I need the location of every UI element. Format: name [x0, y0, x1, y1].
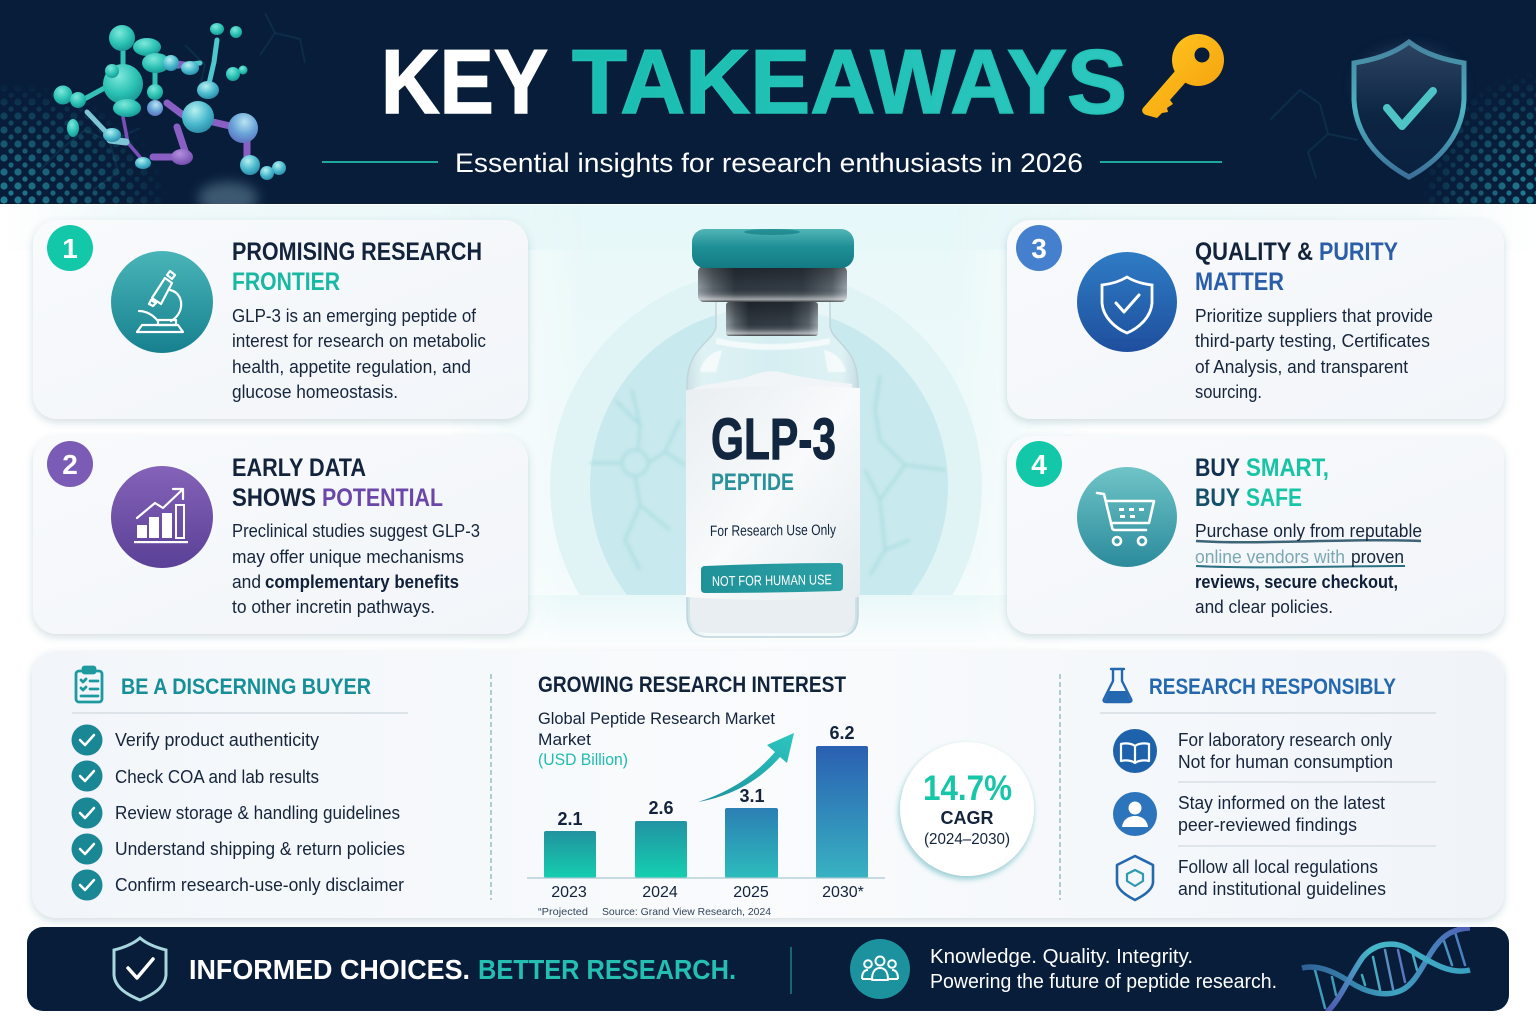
bar chart: 6.2 — [829, 723, 855, 743]
card 3 heading: QUALITY & — [1195, 238, 1313, 266]
card 1 body — [232, 306, 486, 402]
icon: header shield — [1354, 42, 1464, 177]
card 2 body: and — [232, 572, 261, 592]
CAGR callout — [900, 742, 1034, 876]
CAGR callout: 14.7% — [923, 769, 1012, 808]
vial stopper — [726, 302, 818, 336]
card 3 heading: PURITY — [1319, 238, 1398, 266]
card 2 heading: SHOWS — [232, 484, 316, 512]
checklist: Confirm research-use-only disclaimer — [115, 875, 404, 895]
footer headline — [189, 954, 736, 985]
card 3 body: third-party testing, Certificates — [1195, 331, 1430, 351]
card 2 body: to other incretin pathways. — [232, 597, 435, 617]
powder base — [690, 596, 855, 633]
item: local regulations: Follow all local regulations — [1178, 857, 1378, 877]
card 1 body: GLP-3 is an emerging peptide of — [232, 306, 477, 326]
vial label — [686, 386, 860, 600]
card 4 body: online vendors with — [1195, 547, 1345, 567]
title: TAKEAWAYS — [572, 32, 1127, 133]
card 2 body: may offer unique mechanisms — [232, 547, 464, 567]
card 4 body: reviews, secure checkout, — [1195, 572, 1398, 592]
card 2 heading: EARLY DATA — [232, 454, 366, 482]
checklist: Understand shipping & return policies — [115, 839, 405, 859]
item: local regulations — [1117, 856, 1386, 900]
card 4 heading: BUY — [1195, 454, 1240, 482]
icon: footer shield — [114, 938, 166, 1000]
badge 3 — [1016, 225, 1062, 271]
bar chart: 2023 — [551, 884, 587, 901]
card 3 heading — [1195, 238, 1398, 296]
icon: DNA helix — [1302, 928, 1470, 1012]
icon: microscope — [111, 251, 213, 353]
card 4 body: and clear policies. — [1195, 597, 1333, 617]
icon: growth chart — [111, 466, 213, 568]
item: local regulations: and institutional guidelines — [1178, 879, 1386, 899]
molecule illustration — [54, 23, 286, 180]
header banner — [0, 0, 1536, 214]
icon: quality shield — [1077, 252, 1177, 352]
bar chart — [527, 723, 885, 901]
card 4: buy smart — [1007, 436, 1504, 634]
card 1 heading: FRONTIER — [232, 268, 340, 296]
bar chart: 2.1 — [557, 809, 583, 829]
card 2 heading — [232, 454, 443, 512]
section: growing research interest — [527, 672, 1034, 918]
badge 1: 1 — [62, 233, 78, 264]
footer text — [930, 946, 1277, 993]
badge 4: 4 — [1031, 449, 1047, 480]
badge 4 — [1016, 441, 1062, 487]
icon: shopping cart — [1077, 467, 1177, 567]
chart subtitle: Market — [538, 730, 591, 749]
vial cap — [692, 229, 854, 268]
card 2: early data — [33, 436, 528, 634]
item: stay informed — [1113, 792, 1385, 836]
badge 2: 2 — [62, 449, 78, 480]
vial crimp — [698, 266, 847, 302]
item: laboratory use: For laboratory research only — [1178, 730, 1392, 750]
card 4 heading: BUY — [1195, 484, 1240, 512]
vial glass body — [687, 300, 858, 637]
vial label: GLP-3 — [711, 407, 836, 472]
card 1 heading — [232, 238, 482, 296]
footnote: Source: Grand View Research, 2024 — [602, 906, 771, 918]
bar chart: 3.1 — [739, 786, 765, 806]
vial — [686, 229, 860, 637]
card 2 heading: POTENTIAL — [322, 484, 443, 512]
footer headline: BETTER RESEARCH. — [478, 954, 736, 985]
bottom panel — [32, 651, 1504, 918]
chart subtitle: Global Peptide Research Market — [538, 709, 775, 728]
card 1 body: glucose homeostasis. — [232, 382, 398, 402]
subtitle: Essential insights for research enthusiasts in 2026 — [455, 148, 1083, 178]
checklist — [72, 724, 405, 900]
chart subtitle — [538, 709, 775, 769]
item: laboratory use: Not for human consumption — [1178, 752, 1393, 772]
bar chart: 2025 — [733, 884, 769, 901]
item: stay informed: Stay informed on the latest — [1178, 793, 1385, 813]
icon: people — [850, 939, 910, 999]
card 4 heading — [1195, 454, 1329, 512]
card 1 heading: PROMISING RESEARCH — [232, 238, 482, 266]
card 2 body — [232, 521, 480, 617]
card 1 body: health, appetite regulation, and — [232, 357, 471, 377]
chart subtitle: (USD Billion) — [538, 750, 628, 769]
footer text: Knowledge. Quality. Integrity. — [930, 946, 1193, 968]
vial label: For Research Use Only — [710, 522, 836, 540]
card 4 body: Purchase only from reputable — [1195, 521, 1422, 541]
section: be a discerning buyer — [72, 667, 408, 900]
vial label: NOT FOR HUMAN USE — [712, 571, 832, 589]
card 3 body: Prioritize suppliers that provide — [1195, 306, 1433, 326]
checklist: Verify product authenticity — [115, 730, 319, 750]
card 3 heading: MATTER — [1195, 268, 1284, 296]
card 3 body: of Analysis, and transparent — [1195, 357, 1408, 377]
icon: golden key — [1142, 34, 1224, 118]
glass highlights — [700, 338, 846, 372]
card 3 body — [1195, 306, 1433, 402]
footer banner — [27, 927, 1509, 1012]
card 4 body — [1195, 521, 1422, 617]
item: laboratory use — [1113, 729, 1393, 773]
card 4 body: proven — [1351, 547, 1404, 567]
arrow: growth trend — [698, 733, 794, 802]
checklist: Review storage & handling guidelines — [115, 803, 400, 823]
badge 2 — [47, 441, 93, 487]
title: KEY — [381, 32, 548, 133]
bar chart: 2024 — [642, 884, 678, 901]
card 4 heading: SMART, — [1246, 454, 1329, 482]
center background — [0, 205, 1536, 702]
badge 1 — [47, 225, 93, 271]
card 2 body: complementary benefits — [265, 572, 459, 592]
badge 3: 3 — [1031, 233, 1047, 264]
card 1: promising research frontier — [33, 220, 528, 419]
heading: RESEARCH RESPONSIBLY — [1149, 674, 1396, 699]
vial powder — [692, 371, 853, 394]
footer text: Powering the future of peptide research. — [930, 971, 1277, 993]
bar chart: 2.6 — [648, 798, 674, 818]
item: stay informed: peer-reviewed findings — [1178, 815, 1357, 835]
section: research responsibly — [1100, 669, 1436, 900]
CAGR callout: (2024–2030) — [924, 831, 1010, 848]
icon: flask — [1104, 669, 1131, 702]
card 3 body: sourcing. — [1195, 382, 1262, 402]
icon: clipboard — [76, 667, 102, 702]
bar chart: 2030* — [822, 884, 864, 901]
checklist: Check COA and lab results — [115, 767, 319, 787]
card 3: quality and purity — [1007, 220, 1504, 419]
footnote: “Projected — [538, 906, 588, 918]
heading: GROWING RESEARCH INTEREST — [538, 672, 846, 697]
heading: BE A DISCERNING BUYER — [121, 674, 371, 699]
CAGR callout: CAGR — [940, 808, 994, 828]
vial label: PEPTIDE — [711, 469, 794, 496]
footer headline: INFORMED CHOICES. — [189, 954, 470, 985]
card 1 body: interest for research on metabolic — [232, 331, 486, 351]
card 2 body: Preclinical studies suggest GLP-3 — [232, 521, 480, 541]
card 4 heading: SAFE — [1246, 484, 1302, 512]
